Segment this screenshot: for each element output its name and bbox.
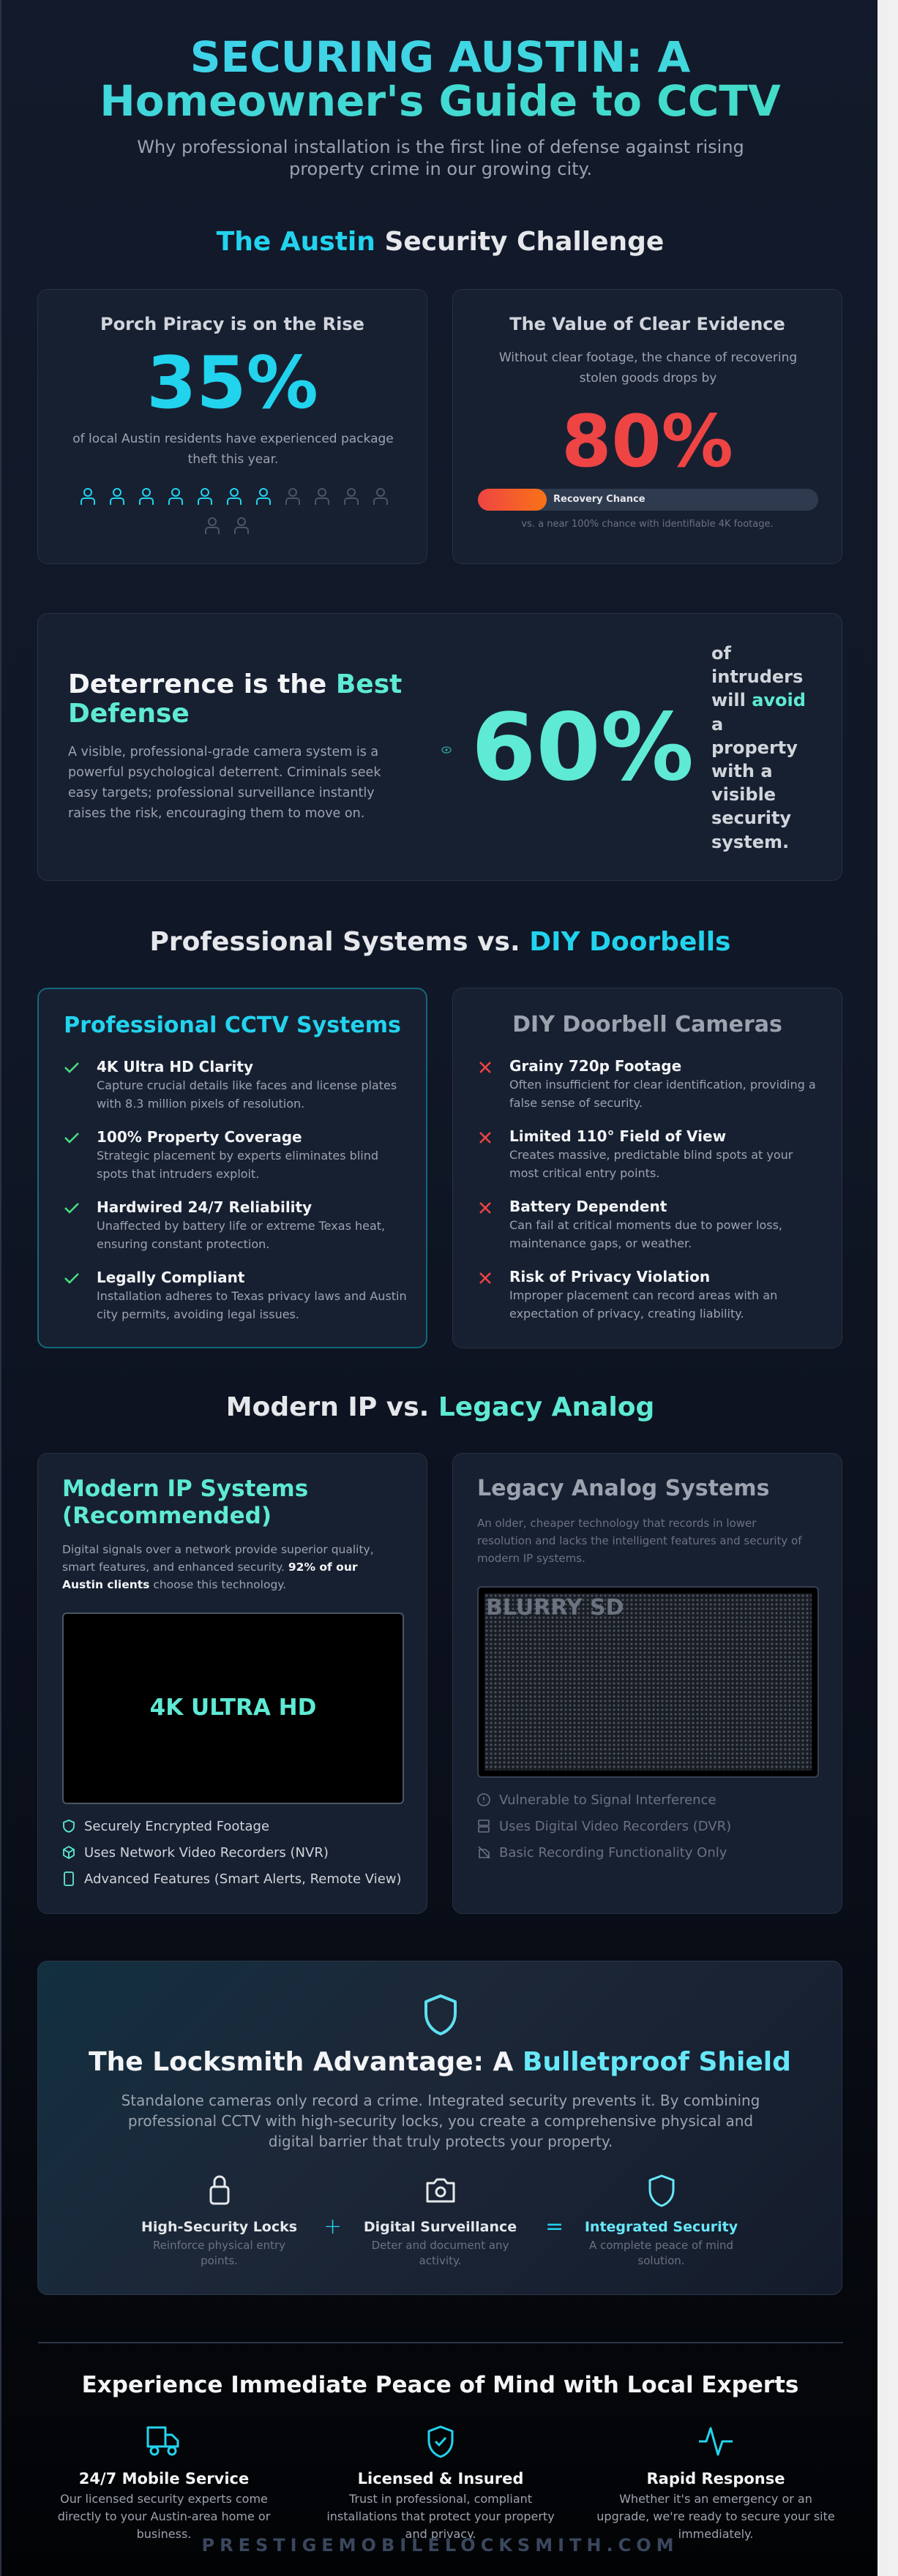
item: privacy: Risk of Privacy Violation xyxy=(509,1268,710,1285)
paragraph: Digital signals over a network provide superior quality, smart features, and enhanced security. 92% of our Austin clients choose this technology. xyxy=(62,1543,374,1591)
feature: rapid response: Rapid Response xyxy=(647,2470,785,2487)
bar: recovery chance xyxy=(478,489,818,511)
item: 4K xyxy=(64,1058,397,1111)
title: SECURING AUSTIN: A xyxy=(190,32,690,82)
item: battery xyxy=(479,1198,782,1250)
screen: 4K ultra HD: 4K ULTRA HD xyxy=(150,1694,316,1721)
item: grainy xyxy=(479,1057,816,1110)
operator: equals: = xyxy=(545,2214,564,2239)
item: compliant: Legally Compliant xyxy=(97,1269,244,1286)
icon: shield xyxy=(424,1994,457,2035)
subtitle: Why professional installation is the first line of defense against rising property crime in our growing city. xyxy=(137,137,744,179)
feature: rapid response: Whether it's an emergency or an upgrade, we're ready to secure your site immediately. xyxy=(596,2492,835,2541)
item: NVR: Uses Network Video Recorders (NVR) xyxy=(84,1845,329,1860)
item: interference: Vulnerable to Signal Interference xyxy=(499,1792,716,1808)
panel: legacy analog xyxy=(452,1453,842,1914)
paragraph: Standalone cameras only record a crime. Integrated security prevents it. By combining professional CCTV with high-security locks, you create a comprehensive physical and digital barrier that truly protects your property. xyxy=(121,2092,760,2150)
bar: recovery chance: Recovery Chance xyxy=(553,494,646,505)
panel title: Modern IP Systems (Recommended) xyxy=(62,1476,308,1529)
item: battery: Can fail at critical moments due to power loss, maintenance gaps, or weather. xyxy=(509,1218,782,1250)
heading: IP vs analog: Modern IP vs. Legacy Analog xyxy=(226,1392,654,1422)
stat 80%: 80% xyxy=(561,400,733,484)
item: compliant xyxy=(64,1269,407,1321)
item: battery: Battery Dependent xyxy=(509,1198,667,1215)
screen: 4K ultra HD xyxy=(62,1612,404,1804)
item: hardwired xyxy=(64,1198,385,1251)
footnote: vs. a near 100% chance with identifiable 4K footage. xyxy=(521,519,774,530)
heading: peace of mind: Experience Immediate Peace of Mind with Local Experts xyxy=(82,2372,798,2398)
title: Homeowner's Guide to CCTV xyxy=(100,76,781,126)
item: integrated xyxy=(585,2174,738,2267)
item: privacy: Improper placement can record areas with an expectation of privacy, creating liability. xyxy=(509,1288,777,1321)
equation: locks + surveillance = security xyxy=(141,2174,738,2267)
item: surveillance: Digital Surveillance xyxy=(364,2219,517,2235)
screen: blurry SD: BLURRY SD xyxy=(486,1595,624,1621)
item: surveillance: Deter and document any activity. xyxy=(372,2239,509,2267)
item: field of view: Limited 110° Field of View xyxy=(509,1127,726,1145)
heading: Austin challenge: The Austin Security Challenge xyxy=(217,227,664,257)
heading: The Locksmith Advantage: A Bulletproof Shield xyxy=(89,2047,791,2077)
feature: mobile service xyxy=(58,2426,271,2541)
list: diy drawbacks xyxy=(479,1057,816,1321)
icon row: people xyxy=(81,488,388,534)
paragraph: A visible, professional-grade camera system is a powerful psychological deterrent. Criminals seek easy targets; professional surveillance instantly raises the risk, encouraging them to move on. xyxy=(68,745,381,821)
item: hardwired: Hardwired 24/7 Reliability xyxy=(97,1198,312,1216)
item: DVR: Uses Digital Video Recorders (DVR) xyxy=(499,1819,731,1834)
item: integrated: A complete peace of mind solution. xyxy=(589,2239,733,2267)
icon: truck xyxy=(146,2426,179,2455)
item: grainy: Often insufficient for clear identification, providing a false sense of security. xyxy=(509,1078,816,1110)
item: basic: Basic Recording Functionality Only xyxy=(499,1845,727,1860)
panel: clear evidence xyxy=(452,289,842,564)
list: pro features xyxy=(64,1058,407,1321)
feature: mobile service: Our licensed security experts come directly to your Austin-area home or business. xyxy=(58,2492,270,2541)
item: coverage: 100% Property Coverage xyxy=(97,1128,302,1146)
panel: modern IP xyxy=(37,1453,427,1914)
feature: licensed xyxy=(326,2426,555,2541)
panel title: DIY Doorbell Cameras xyxy=(512,1012,782,1037)
icon: eye xyxy=(441,746,452,754)
item: locks xyxy=(141,2176,297,2267)
panel: locksmith advantage xyxy=(37,1961,842,2295)
item: coverage xyxy=(64,1128,378,1181)
item: compliant: Installation adheres to Texas privacy laws and Austin city permits, avoiding legal issues. xyxy=(97,1289,407,1321)
panel title: Professional CCTV Systems xyxy=(64,1013,401,1038)
item: privacy xyxy=(479,1268,777,1321)
item: surveillance xyxy=(364,2179,517,2267)
item: locks: High-Security Locks xyxy=(141,2219,297,2235)
title xyxy=(100,32,781,126)
item: integrated: Integrated Security xyxy=(585,2219,738,2235)
list: analog drawbacks xyxy=(477,1792,731,1860)
screen: blurry SD xyxy=(477,1586,819,1778)
item: coverage: Strategic placement by experts eliminates blind spots that intruders exploit. xyxy=(97,1149,378,1181)
item: 4K: Capture crucial details like faces and license plates with 8.3 million pixels of resolution. xyxy=(97,1078,397,1111)
feature: licensed: Licensed & Insured xyxy=(358,2470,523,2487)
item: field of view: Creates massive, predictable blind spots at your most critical entry points. xyxy=(509,1148,793,1180)
item: grainy: Grainy 720p Footage xyxy=(509,1057,681,1075)
list: IP features xyxy=(63,1819,402,1887)
item: encrypted: Securely Encrypted Footage xyxy=(84,1819,269,1834)
panel: DIY doorbell xyxy=(452,988,842,1348)
stat 60%: 60% xyxy=(471,693,694,801)
panel title: Legacy Analog Systems xyxy=(477,1476,769,1501)
feature: rapid response xyxy=(596,2427,835,2541)
stat description: of intruders will avoid a property with a visible security system. xyxy=(711,643,806,852)
description: Without clear footage, the chance of recovering stolen goods drops by xyxy=(499,350,797,386)
panel: professional cctv xyxy=(37,988,427,1348)
heading: pro vs diy: Professional Systems vs. DIY Doorbells xyxy=(149,927,730,957)
item: field of view xyxy=(479,1127,793,1180)
operator: plus: + xyxy=(323,2214,342,2239)
footer: website: PRESTIGEMOBILELOCKSMITH.COM xyxy=(202,2535,678,2556)
panel: deterrence xyxy=(37,613,842,881)
stat description: of local Austin residents have experienced package theft this year. xyxy=(72,432,394,467)
panel: porch piracy xyxy=(37,289,427,564)
item: 4K: 4K Ultra HD Clarity xyxy=(97,1058,253,1075)
feature: licensed: Trust in professional, compliant installations that protect your property and privacy. xyxy=(326,2492,555,2541)
item: locks: Reinforce physical entry points. xyxy=(153,2239,285,2267)
stat 35%: 35% xyxy=(146,342,318,425)
item: advanced: Advanced Features (Smart Alerts, Remote View) xyxy=(84,1871,402,1887)
panel heading: The Value of Clear Evidence xyxy=(509,314,785,334)
paragraph: An older, cheaper technology that records in lower resolution and lacks the intelligent features and security of modern IP systems. xyxy=(477,1517,802,1565)
feature: mobile service: 24/7 Mobile Service xyxy=(79,2470,249,2487)
icon: pulse xyxy=(699,2427,733,2455)
icon: shield check xyxy=(427,2426,454,2458)
item: hardwired: Unaffected by battery life or extreme Texas heat, ensuring constant protection. xyxy=(97,1219,385,1251)
panel heading: Porch Piracy is on the Rise xyxy=(100,314,364,334)
heading: Deterrence is the Best Defense xyxy=(68,669,402,729)
